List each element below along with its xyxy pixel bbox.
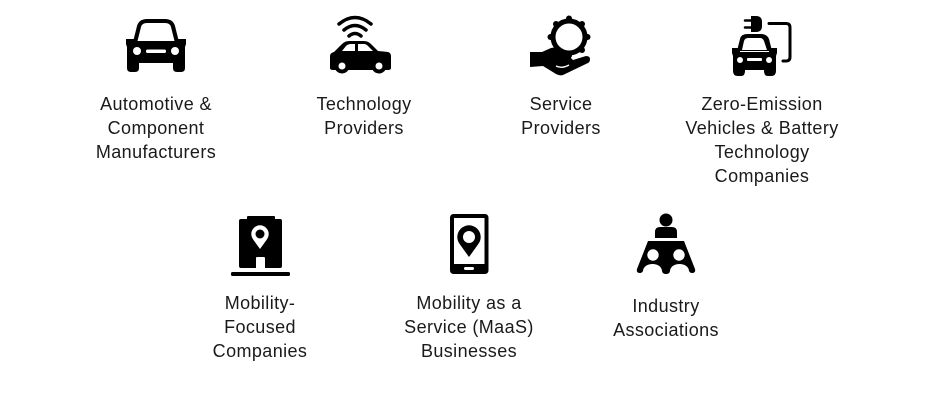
icon: electric car with plug [732, 16, 790, 76]
label: zero-emission [685, 94, 839, 186]
icon: car front [126, 19, 186, 72]
icon: hand holding gear [530, 16, 590, 75]
label: mobility-focused: Mobility- [225, 293, 295, 313]
label: mobility-focused: Companies [213, 341, 307, 361]
label: industry associations: Associations [613, 320, 719, 340]
icon: connected car with wifi [330, 18, 391, 74]
label: maas: Businesses [421, 341, 517, 361]
label: automotive [96, 94, 216, 162]
label: zero-emission: Companies [715, 166, 809, 186]
label: automotive: Automotive & [100, 94, 212, 114]
label: zero-emission: Technology [714, 142, 810, 162]
label: service providers: Service [530, 94, 592, 114]
label: zero-emission: Vehicles & Battery [685, 118, 839, 138]
icon: people at a table [637, 214, 695, 274]
icon: phone with location pin [450, 214, 488, 274]
label: automotive: Manufacturers [96, 142, 216, 162]
label: industry associations: Industry [632, 296, 700, 316]
label: industry associations [613, 296, 719, 340]
label: service providers [521, 94, 601, 138]
label: maas [404, 293, 534, 361]
label: technology providers [316, 94, 412, 138]
label: maas: Mobility as a [416, 293, 522, 313]
label: mobility-focused: Focused [224, 317, 296, 337]
label: technology providers: Technology [316, 94, 412, 114]
label: maas: Service (MaaS) [404, 317, 534, 337]
label: zero-emission: Zero-Emission [701, 94, 823, 114]
icon: building with location pin [231, 216, 290, 276]
label: technology providers: Providers [324, 118, 404, 138]
label: automotive: Component [108, 118, 204, 138]
label: service providers: Providers [521, 118, 601, 138]
label: mobility-focused [213, 293, 307, 361]
